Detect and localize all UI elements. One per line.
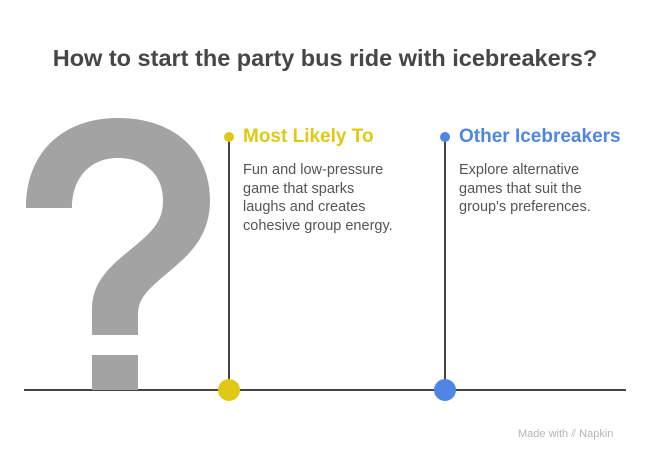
heading: Most Likely To: Most Likely To xyxy=(243,126,374,147)
text: Other Icebreakers: games that suit the xyxy=(459,180,582,196)
title: How to start the party bus ride with icebreakers? xyxy=(53,45,597,71)
text: Other Icebreakers xyxy=(459,162,591,215)
marker: Most Likely To xyxy=(218,132,240,401)
text: Most Likely To: laughs and creates xyxy=(243,199,366,215)
heading: Other Icebreakers: Other Icebreakers xyxy=(459,126,621,147)
text: Most Likely To: game that sparks xyxy=(243,180,354,196)
text: Other Icebreakers: Explore alternative xyxy=(459,162,579,178)
footer credit: Made with ⫽ Napkin xyxy=(518,428,613,440)
text: Other Icebreakers: group's preferences. xyxy=(459,199,591,215)
text: Most Likely To: cohesive group energy. xyxy=(243,218,393,234)
icon: question mark xyxy=(26,118,210,390)
text: Most Likely To: Fun and low-pressure xyxy=(243,162,383,178)
marker: Other Icebreakers xyxy=(434,132,456,401)
text: Most Likely To xyxy=(243,162,393,234)
